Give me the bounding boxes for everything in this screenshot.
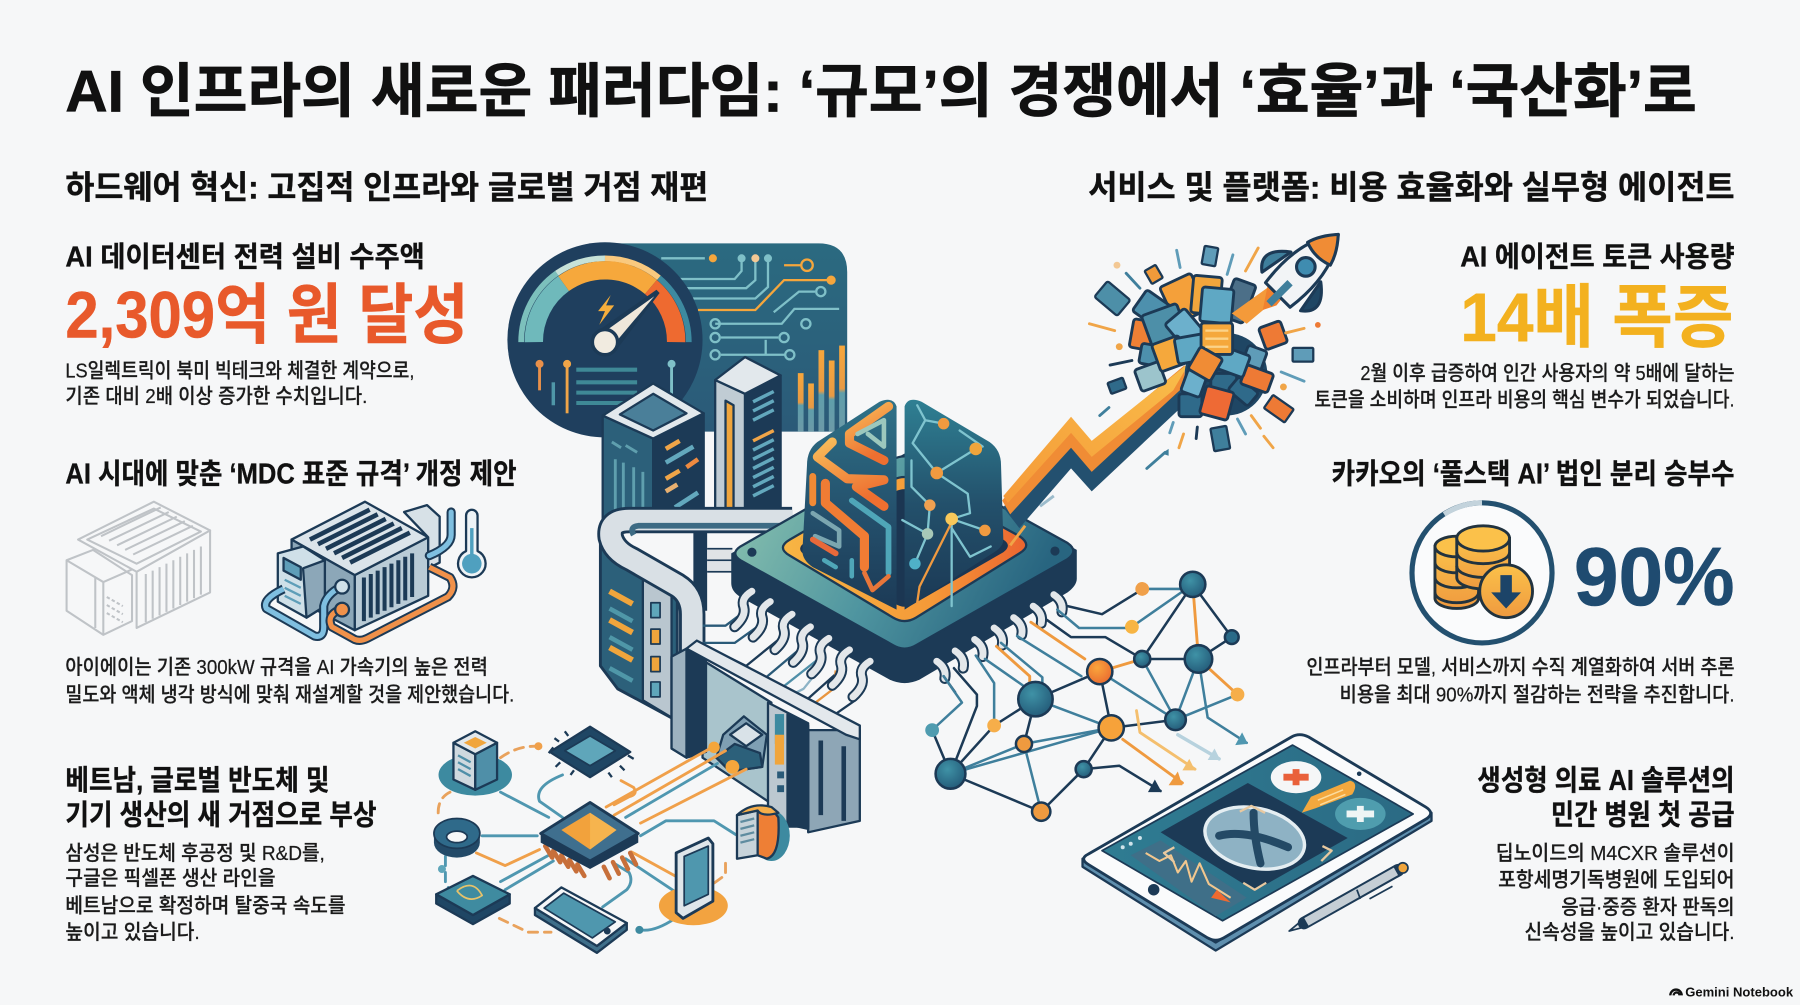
text block: medical AI: 생성형 의료 AI 솔루션의: [1477, 765, 1735, 797]
heading: hardware innovation: 하드웨어 혁신: 고집적 인프라와 글로벌 거점 재편: [65, 170, 708, 206]
text block: power equipment orders: AI 데이터센터 전력 설비 수주액: [65, 241, 425, 273]
illustration: server tower right: [715, 357, 781, 511]
text block: medical AI: 신속성을 높이고 있습니다.: [1524, 921, 1735, 944]
icon: small microchip: [549, 727, 634, 777]
icon: ring module: [434, 819, 480, 858]
icon: smartphone on amber disc: [659, 838, 728, 925]
traces: chip to rack: [703, 608, 866, 719]
illustration: device supply network connectors: [438, 742, 746, 934]
text block: agent token usage: 토큰을 소비하며 인프라 비용의 핵심 변수가 되었습니다.: [1314, 388, 1735, 411]
illustration: medical tablet: [1083, 735, 1432, 951]
stat: 90%: 90%: [1574, 530, 1735, 623]
text block: power equipment orders: 기존 대비 2배 이상 증가한 수치입니다.: [65, 385, 367, 408]
text block: Vietnam production hub: 구글은 픽셀폰 생산 라인을: [65, 867, 276, 890]
text block: Vietnam production hub: [65, 765, 377, 944]
text block: medical AI: 응급·중증 환자 판독의: [1561, 896, 1735, 919]
text block: MDC description: [65, 656, 514, 706]
title: AI 인프라의 새로운 패러다임: ‘규모’의 경쟁에서 ‘효율’과 ‘국산화’로: [65, 59, 1697, 124]
icon: rocket: [1232, 209, 1364, 329]
text block: power equipment orders: LS일렉트릭이 북미 빅테크와 체결한 계약으로,: [65, 360, 414, 383]
icon: coins with down arrow: [1412, 503, 1552, 643]
icon: tablet device: [535, 887, 627, 953]
text block: MDC standard heading: AI 시대에 맞춘 ‘MDC 표준 규격’ 개정 제안: [65, 458, 517, 490]
footer: Gemini Notebook badge: Gemini Notebook: [1685, 984, 1794, 999]
text block: MDC description: 아이에이는 기존 300kW 규격을 AI 가속기의 높은 전력: [65, 656, 488, 679]
text block: power equipment orders: [65, 241, 468, 408]
panel: circuit board behind gauge: [605, 243, 847, 432]
illustration: exploding data blocks: [1089, 246, 1321, 468]
arrow: zigzag growth line: [1002, 363, 1189, 545]
illustration: cable gate frame: [672, 641, 860, 832]
icon: central processor: [541, 802, 638, 878]
illustration: server tower left: [603, 383, 704, 528]
text block: Vietnam production hub: 삼성은 반도체 후공정 및 R&D를,: [65, 842, 325, 865]
text block: Kakao description: 비용을 최대 90%까지 절감하는 전략을 추진합니다.: [1340, 683, 1735, 706]
illustration: network graph: [925, 572, 1248, 821]
text block: medical AI: [1477, 765, 1735, 944]
text block: Vietnam production hub: 베트남, 글로벌 반도체 및: [65, 765, 329, 797]
illustration: AI brain: [802, 400, 1003, 610]
heading: services and platforms: 서비스 및 플랫폼: 비용 효율화와 실무형 에이전트: [1088, 170, 1735, 206]
text block: medical AI: 민간 병원 첫 공급: [1551, 799, 1735, 831]
text block: Kakao description: 인프라부터 모델, 서비스까지 수직 계열화하여 서버 추론: [1306, 656, 1735, 679]
illustration: chip package: [731, 453, 1077, 683]
text block: power equipment orders: 2,309억 원 달성: [65, 279, 468, 352]
icon: storage cylinder: [737, 805, 790, 861]
icon: flat device: [436, 876, 510, 924]
icon: liquid-cooled MDC: [266, 502, 486, 640]
text block: medical AI: 포항세명기독병원에 도입되어: [1498, 868, 1735, 891]
text block: agent token usage: 14배 폭증: [1460, 279, 1733, 356]
text block: agent token usage: [1314, 241, 1735, 411]
text block: Vietnam production hub: 베트남으로 확정하며 탈중국 속도를: [65, 895, 346, 918]
heading: Kakao full-stack AI: 카카오의 ‘풀스택 AI’ 법인 분리 승부수: [1332, 458, 1735, 490]
text block: agent token usage: AI 에이전트 토큰 사용량: [1460, 241, 1735, 273]
text block: Kakao description: [1306, 656, 1735, 706]
illustration: curved rack and pipe: [600, 520, 792, 721]
text block: Vietnam production hub: 기기 생산의 새 거점으로 부상: [65, 799, 377, 831]
icon: legacy MDC outline: [67, 502, 210, 635]
text block: medical AI: 딥노이드의 M4CXR 솔루션이: [1496, 842, 1735, 865]
icon: stylus pen: [1289, 863, 1408, 931]
icon: server on disc: [439, 731, 512, 796]
text block: Vietnam production hub: 높이고 있습니다.: [65, 921, 200, 944]
text block: agent token usage: 2월 이후 급증하여 인간 사용자의 약 5배에 달하는: [1360, 362, 1735, 385]
icon: power gauge: [507, 242, 703, 437]
text block: MDC description: 밀도와 액체 냉각 방식에 맞춰 재설계할 것을 제안했습니다.: [65, 683, 514, 706]
illustration: chip pins: [735, 591, 1062, 697]
